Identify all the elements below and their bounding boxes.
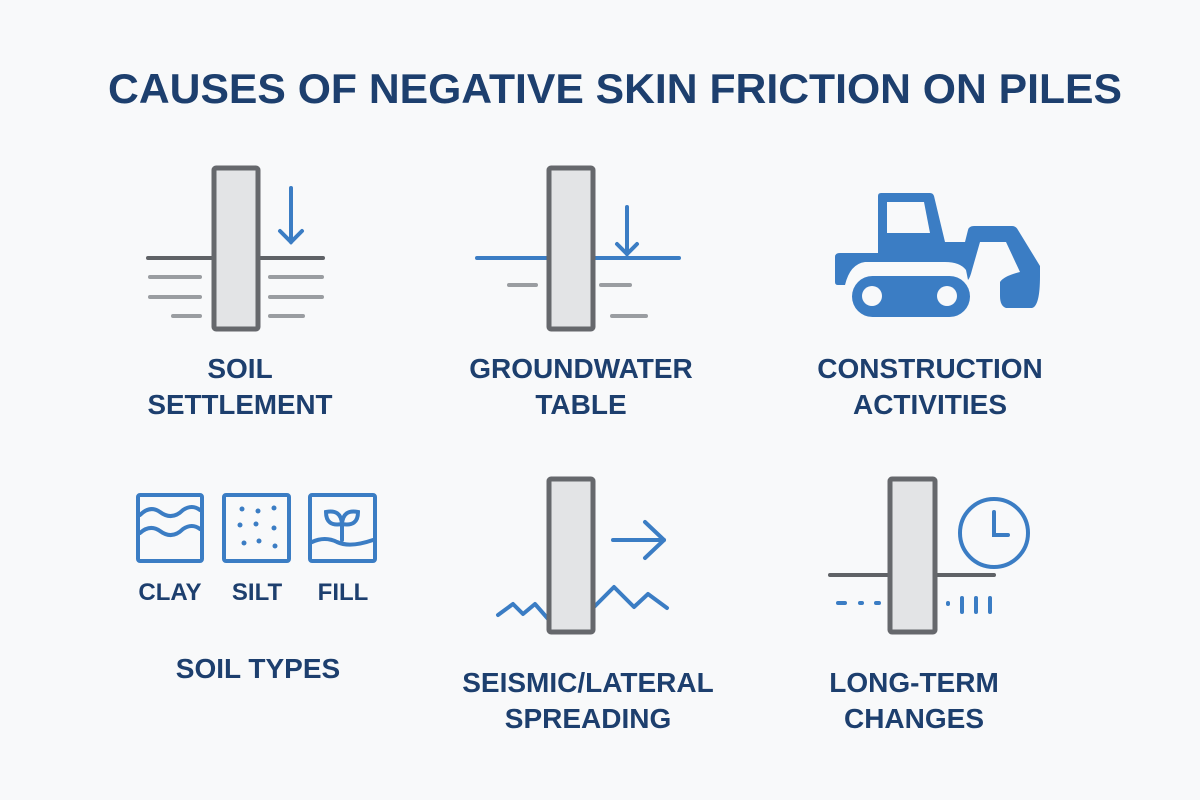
icon: pile with water table	[477, 168, 679, 329]
label: groundwater table: GROUNDWATER	[469, 353, 693, 384]
panel: seismic/lateral spreading	[462, 479, 714, 734]
label: silt: SILT	[232, 579, 282, 606]
label: long-term changes: CHANGES	[844, 703, 984, 734]
label: soil settlement	[148, 353, 332, 420]
label: construction activities: ACTIVITIES	[853, 389, 1007, 420]
label: long-term changes	[829, 667, 999, 734]
icon: pile with settling soil	[148, 168, 323, 329]
label: groundwater table	[469, 353, 693, 420]
panel: long-term changes	[829, 479, 1028, 734]
icon: fill box with sprout	[310, 495, 375, 561]
label: seismic/lateral spreading: SEISMIC/LATERAL	[462, 667, 714, 698]
icon: excavator	[835, 193, 1040, 317]
label: long-term changes: LONG-TERM	[829, 667, 999, 698]
icon: clay box	[138, 495, 202, 561]
label: construction activities: CONSTRUCTION	[817, 353, 1043, 384]
panel: soil settlement	[148, 168, 332, 420]
panel: groundwater table	[469, 168, 693, 420]
label: fill: FILL	[318, 579, 368, 606]
icon: pile with clock	[830, 479, 1028, 632]
icon: pile with lateral movement	[498, 479, 667, 632]
label: soil settlement: SETTLEMENT	[148, 389, 332, 420]
panel: construction activities	[817, 193, 1043, 420]
icon: silt box	[224, 495, 289, 561]
panel: soil types	[138, 495, 375, 684]
label: soil settlement: SOIL	[207, 353, 273, 384]
label: soil types: SOIL TYPES	[176, 653, 340, 684]
label: seismic/lateral spreading: SPREADING	[505, 703, 671, 734]
label: seismic/lateral spreading	[462, 667, 714, 734]
label: groundwater table: TABLE	[535, 389, 627, 420]
label: clay: CLAY	[138, 579, 202, 606]
label: construction activities	[817, 353, 1043, 420]
title: CAUSES OF NEGATIVE SKIN FRICTION ON PILES	[108, 65, 1122, 112]
